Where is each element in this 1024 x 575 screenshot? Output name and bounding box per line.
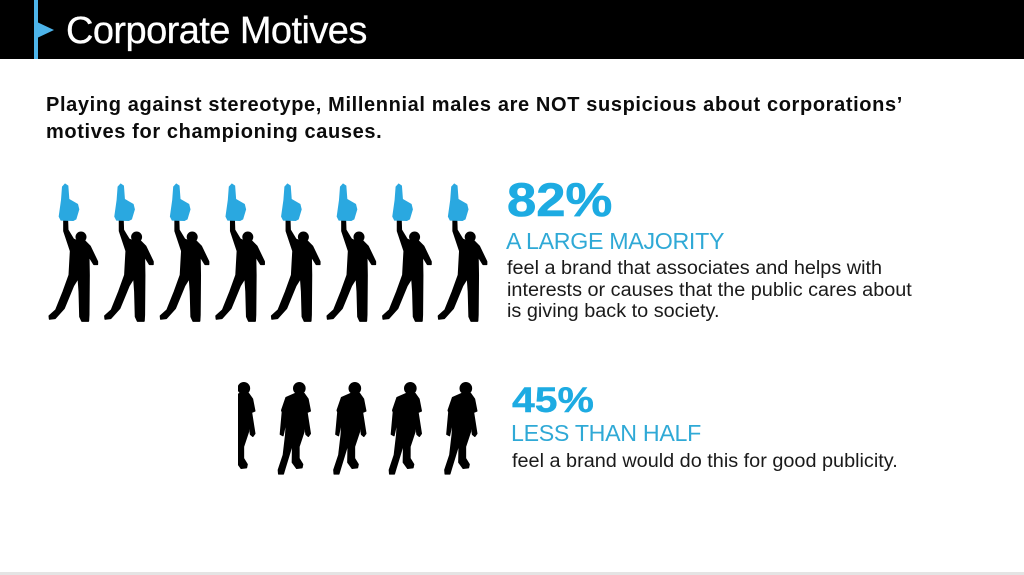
title bar	[0, 0, 1024, 59]
description: 82%	[507, 257, 912, 322]
stat: 82%: 82%	[507, 173, 612, 226]
figure 5	[272, 183, 320, 321]
standing figure 4	[389, 383, 421, 474]
description: 82%: interests or causes that the public cares about	[507, 279, 912, 301]
stat: 45%: 45%	[512, 381, 594, 420]
standing figure 5	[445, 383, 477, 474]
description: 45%: feel a brand would do this for good publicity.	[512, 450, 898, 472]
standing figure 2	[278, 383, 310, 474]
figure 3	[161, 183, 209, 321]
intro statement: motives for championing causes.	[46, 121, 382, 143]
description: 82%: feel a brand that associates and helps with	[507, 257, 882, 279]
icon: blue flag marker	[34, 0, 54, 59]
label: less than half: LESS THAN HALF	[511, 420, 701, 446]
partial standing figure	[238, 382, 256, 469]
standing figure 3	[334, 383, 366, 474]
title: Corporate Motives	[66, 10, 367, 52]
bottom edge line	[0, 572, 1024, 575]
description: 82%: is giving back to society.	[507, 300, 720, 322]
intro statement: Playing against stereotype, Millennial males are NOT suspicious about corporations’	[46, 94, 903, 116]
figure 7	[383, 183, 431, 321]
figure 4	[216, 183, 264, 321]
figure 8	[439, 183, 487, 321]
intro statement	[46, 94, 903, 143]
label: a large majority: A LARGE MAJORITY	[506, 228, 724, 254]
figure 1	[49, 183, 97, 321]
pictogram: raised-hand and standing figures	[48, 183, 488, 475]
figure 6	[327, 183, 375, 321]
figure 2	[105, 183, 153, 321]
